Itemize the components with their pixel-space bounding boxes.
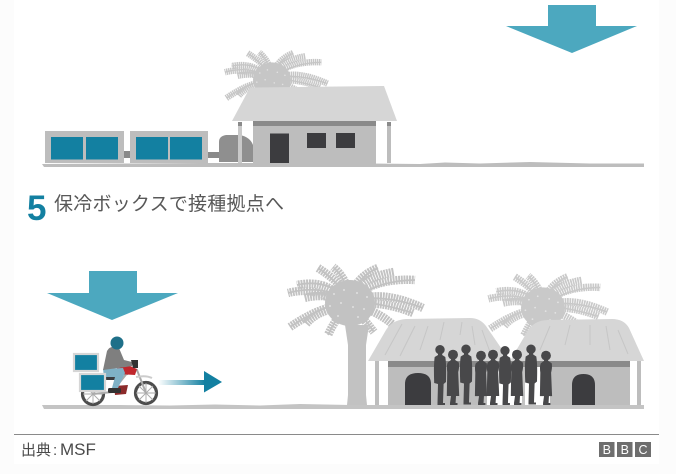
BBC logo: C (638, 443, 648, 457)
scene: storage site (42, 52, 644, 167)
lower cool box (80, 374, 105, 391)
heading: step 5 (27, 189, 284, 228)
footer rule (14, 434, 659, 435)
pipe connector (124, 151, 130, 158)
rider legs (103, 368, 125, 388)
frame (93, 370, 146, 394)
heading text: 保冷ボックスで接種拠点へ (54, 193, 284, 215)
rider torso (103, 346, 132, 370)
door (405, 373, 431, 405)
handlebar (131, 360, 138, 368)
roof thatch (385, 322, 490, 356)
building (232, 86, 397, 164)
icon: motorbike courier (74, 336, 156, 404)
door (572, 374, 595, 405)
roof thatch (540, 325, 628, 354)
people queue (434, 344, 552, 405)
BBC logo: B (621, 443, 629, 457)
boot (108, 388, 121, 393)
fuel tank (117, 366, 137, 375)
container 1 (45, 131, 124, 163)
helmet (110, 336, 124, 350)
arrow: motion arrow (158, 371, 222, 392)
hut: right (510, 319, 644, 405)
BBC logo: B (603, 443, 611, 457)
front fender (136, 376, 152, 378)
engine (114, 385, 128, 395)
ground (42, 162, 644, 167)
icon: palm tree behind building (225, 52, 327, 104)
seat (105, 375, 118, 380)
arrow: lower down arrow (47, 271, 178, 320)
step number: 5 (27, 189, 46, 228)
top cool box (74, 354, 98, 371)
icon: large palm tree (288, 267, 423, 405)
source text: MSF (60, 440, 96, 459)
ground: lower scene (42, 404, 644, 409)
front wheel (136, 382, 156, 404)
source text: : (53, 442, 57, 459)
rear wheel (82, 384, 104, 404)
pipe to generator (208, 152, 220, 158)
icon: small palm tree (488, 276, 607, 336)
generator tank (219, 135, 253, 162)
source text: 出典 (21, 442, 51, 459)
hut: left (368, 318, 513, 405)
container 2 (130, 131, 208, 163)
BBC logo (599, 442, 651, 457)
arrow: top down arrow (506, 5, 637, 53)
